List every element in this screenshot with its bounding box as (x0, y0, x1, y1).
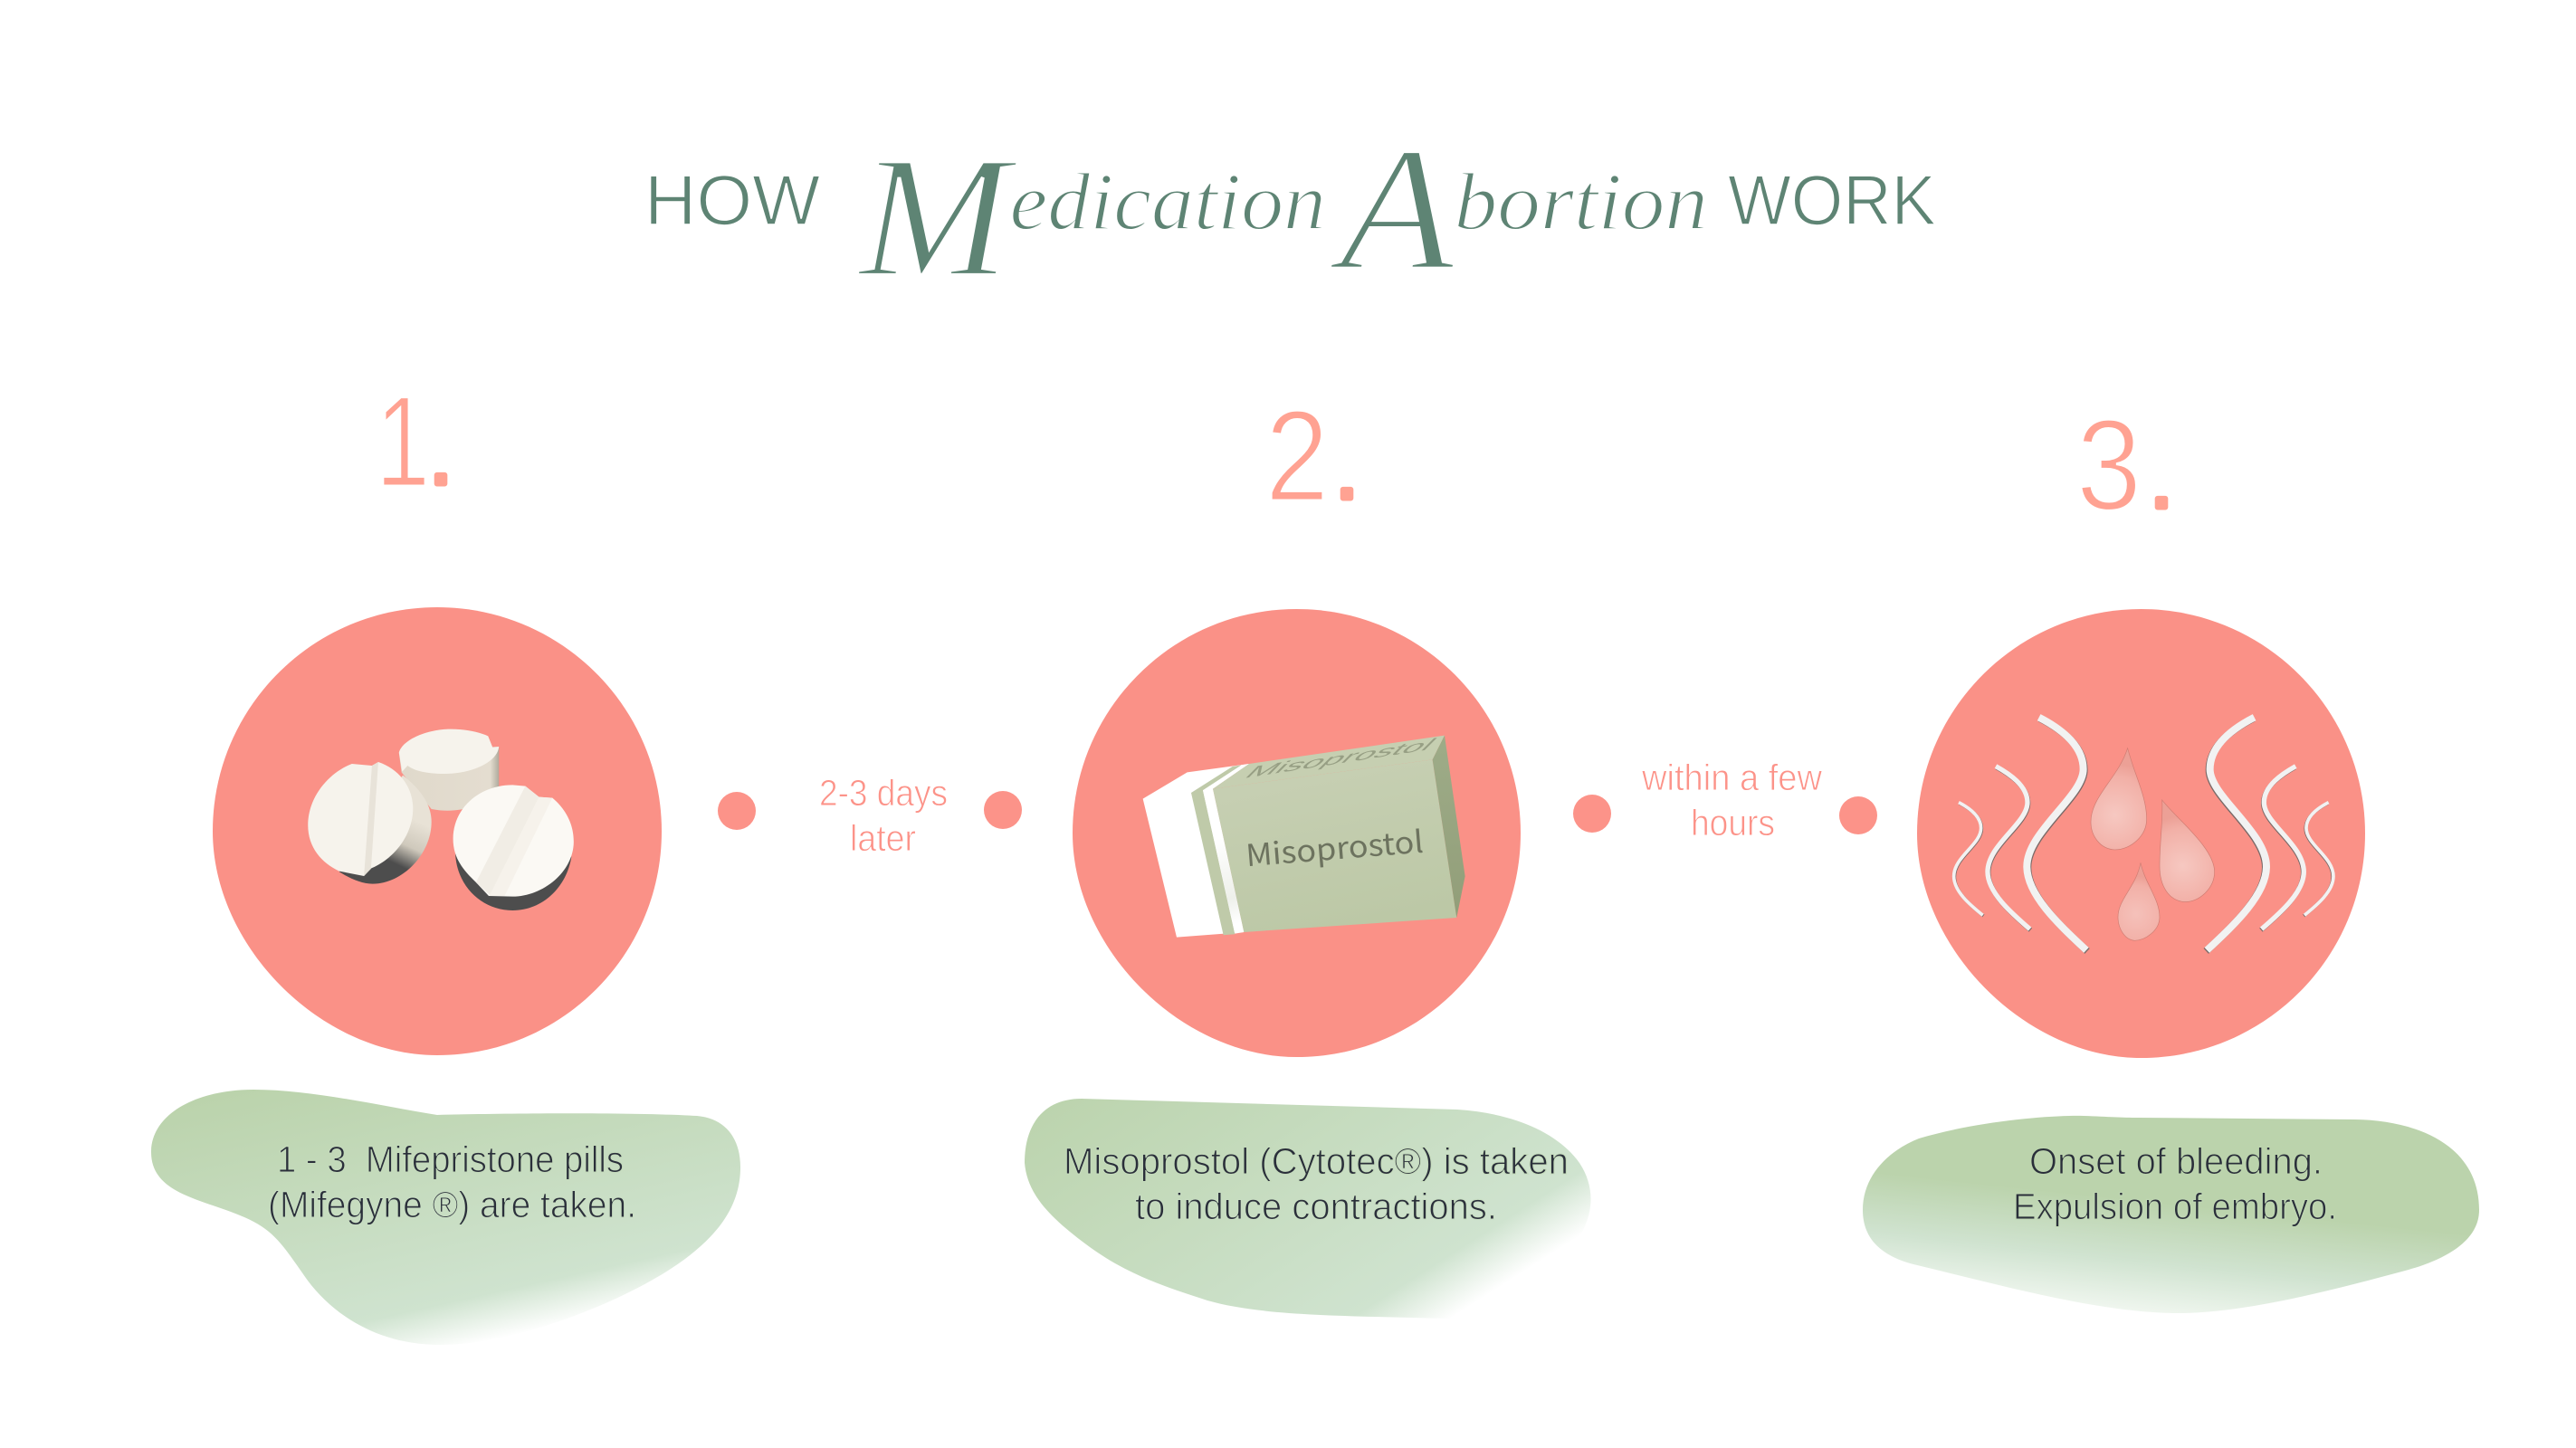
panel: step 3 description: Onset of bleeding. (2029, 1140, 2323, 1182)
panel: step 2 description: Misoprostol (Cytotec®) is taken (1064, 1140, 1569, 1182)
step number 3: 3 (2076, 394, 2142, 538)
panel: step 3 description (1863, 1116, 2479, 1313)
step number 3: . (2151, 434, 2173, 525)
panel: step 3 description: Expulsion of embryo. (2013, 1186, 2337, 1227)
panel: step 3 circle with drops (1917, 609, 2365, 1058)
title: WORK (1728, 160, 1936, 240)
panel: step 1 description: (Mifegyne ®) are taken. (268, 1184, 636, 1225)
connector: within a few hours: within a few (1641, 757, 1822, 798)
step number 1: 1 (376, 370, 430, 514)
icon: misoprostol box: Misoprostol (1239, 735, 1442, 782)
step number 2: 2 (1265, 385, 1329, 529)
title (644, 111, 1936, 313)
panel: step 1 description: 1 - 3 Mifepristone pills (277, 1138, 624, 1180)
connector: 2-3 days later: 2-3 days (819, 772, 948, 814)
panel: step 1 circle with pills (213, 607, 662, 1055)
connector: 2-3 days later (718, 772, 1022, 859)
connector: within a few hours (1573, 757, 1877, 843)
panel: step 1 description (151, 1090, 740, 1345)
connector: 2-3 days later: later (850, 817, 916, 859)
step number 1: . (429, 412, 453, 502)
title: M (857, 121, 1018, 313)
panel: step 2 description (1025, 1099, 1590, 1319)
panel: step 2 circle with box (1073, 609, 1521, 1057)
icon: three pills (308, 729, 574, 910)
title: bortion (1455, 157, 1708, 247)
title: A (1329, 111, 1455, 308)
icon: misoprostol box (1143, 735, 1465, 938)
step number 2: . (1336, 426, 1359, 517)
panel: step 2 description: to induce contractions. (1135, 1186, 1497, 1227)
icon: bleeding drops and waves (1954, 718, 2333, 951)
title: HOW (644, 160, 820, 240)
connector: within a few hours: hours (1691, 802, 1775, 843)
icon: misoprostol box: Misoprostol (1244, 817, 1425, 875)
title: edication (1010, 157, 1326, 247)
